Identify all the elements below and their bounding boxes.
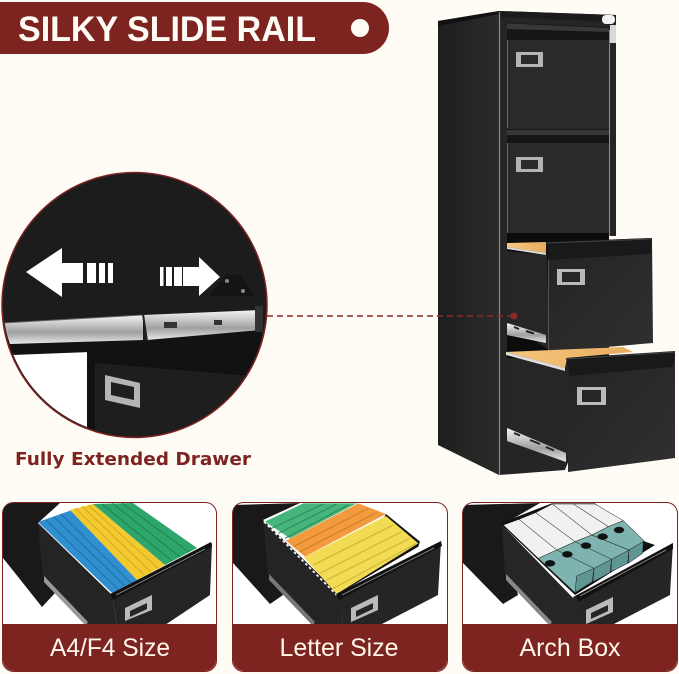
left arrow [26, 248, 113, 297]
card: A4/F4 size [2, 502, 216, 672]
drawer 1 handle [516, 52, 543, 67]
filing cabinet [438, 11, 675, 475]
zoom circle: slide rail detail [2, 172, 270, 440]
small drawer handle [105, 375, 140, 408]
banner heading [0, 2, 389, 54]
open drawer 3 [507, 233, 653, 358]
lock [602, 15, 616, 43]
drawer 2 [507, 129, 609, 233]
drawer 4 handle [577, 387, 606, 405]
card: letter size [232, 502, 448, 672]
dashed connector line [267, 312, 518, 320]
caption: fully extended drawer: Fully Extended Drawer [15, 449, 251, 470]
card: arch box: Arch Box [520, 634, 621, 662]
open drawer 4 [506, 347, 675, 472]
card: A4/F4 size: A4/F4 Size [50, 634, 170, 662]
binders [500, 503, 655, 595]
bracket [211, 278, 245, 295]
banner heading: SILKY SLIDE RAIL [18, 10, 316, 49]
card: letter size: Letter Size [280, 634, 398, 662]
hanging files [264, 503, 420, 595]
card: arch box [462, 502, 678, 672]
drawer 1 [507, 23, 609, 129]
drawer 2 handle [516, 157, 543, 172]
right arrow [160, 257, 220, 296]
rail [3, 306, 263, 344]
drawer 3 handle [557, 269, 585, 285]
